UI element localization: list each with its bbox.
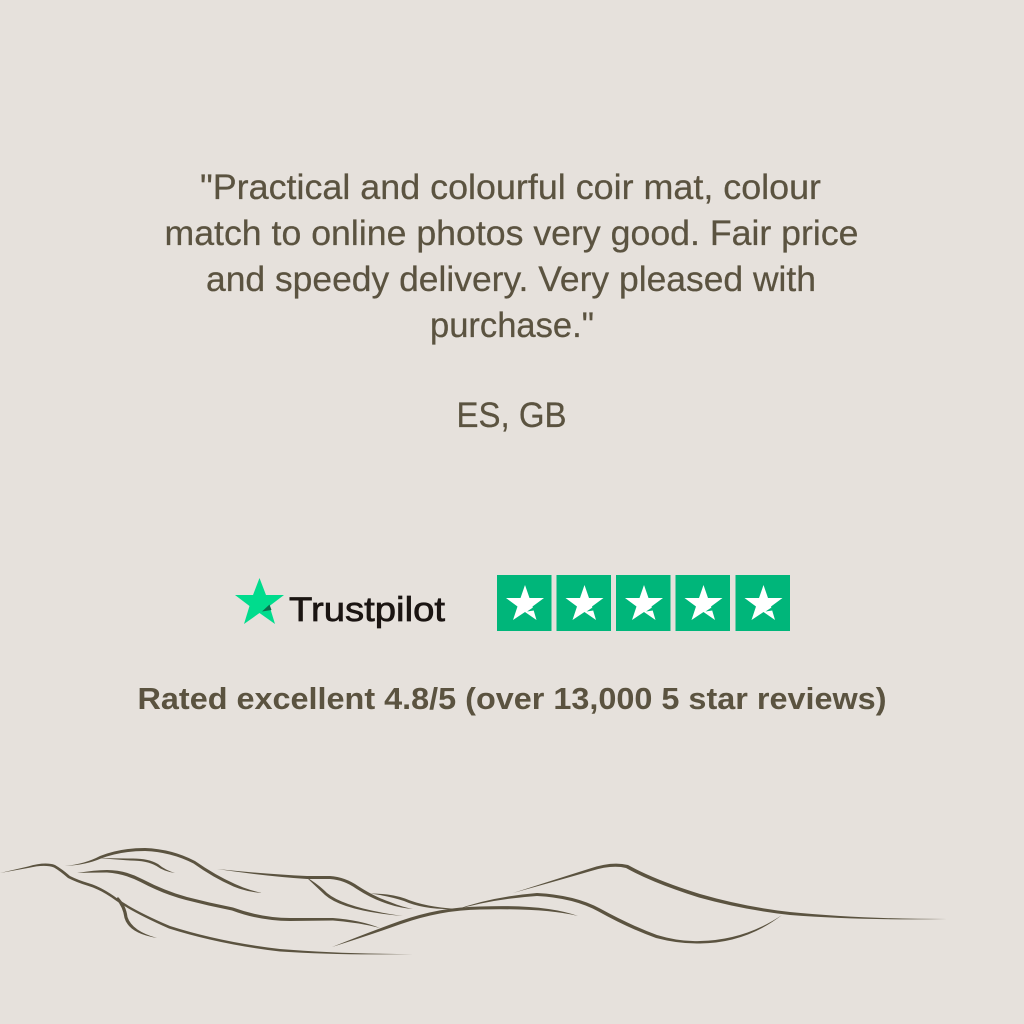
reviewer name: ES, GB [456, 396, 566, 435]
review quote: "Practical and colourful coir mat, colour [200, 168, 821, 207]
five star rating [497, 575, 790, 631]
star box 1 [497, 575, 552, 631]
star box 5 [736, 575, 790, 631]
star box 3 [616, 575, 670, 631]
rating summary: Rated excellent 4.8/5 (over 13,000 5 star reviews) [138, 681, 886, 716]
review quote: and speedy delivery. Very pleased with [206, 260, 816, 299]
review quote: purchase." [430, 306, 594, 345]
star box 4 [676, 575, 730, 631]
review quote: match to online photos very good. Fair price [164, 214, 858, 253]
review quote [164, 168, 858, 345]
icon: Trustpilot star [235, 578, 284, 624]
Trustpilot logo [235, 578, 446, 629]
line art: hills [0, 848, 947, 954]
star box 2 [556, 575, 611, 631]
wordmark: Trustpilot [289, 591, 446, 629]
